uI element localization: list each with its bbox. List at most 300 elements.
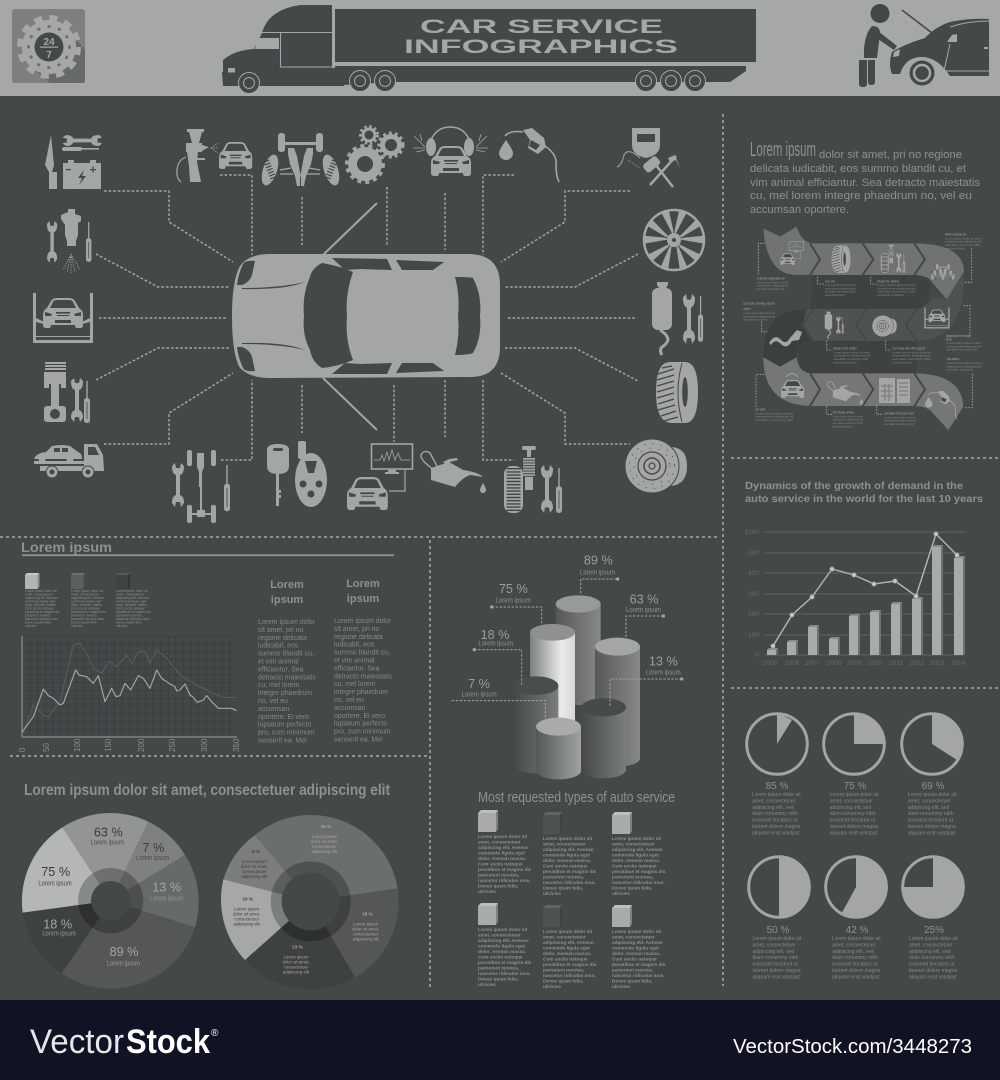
tiny captions: consectetuer adipiscing elit	[833, 418, 863, 422]
service item 6: ultricies	[612, 984, 630, 989]
text column 2: sit amet, pri no	[334, 626, 379, 633]
service item 1: dolor. Aenean massa.	[478, 856, 526, 861]
tiny labels: Car brake disk with support	[892, 347, 925, 351]
pie 69 percent: diam nonummy nibh	[908, 811, 954, 817]
pie 85 percent: diam nonummy nibh	[752, 811, 798, 817]
service item 1	[478, 810, 532, 894]
pie 75 percent: euismod tincidunt ut	[830, 818, 876, 824]
tiny captions: euismod tincidunt	[833, 360, 857, 364]
callout labels: 75 %	[499, 582, 528, 596]
pie 85 percent	[747, 712, 807, 836]
tiny captions: consectetuer adipiscing elit	[947, 344, 982, 348]
intro text: vim animal efficiantur. Sea detracto maiestatis	[750, 177, 981, 189]
icon: 24/7 gear badge: 7	[46, 50, 52, 61]
service item 2: commodo ligula eget	[543, 852, 590, 858]
service item 6: amet, consectetuer	[612, 934, 655, 940]
service item 2	[543, 812, 597, 896]
legend cube: mid: dolor. Aenean massa.	[71, 603, 103, 607]
text column 2: efficiantur. Sea	[334, 665, 380, 672]
pie 69 percent	[902, 712, 962, 836]
y axis labels	[745, 529, 759, 659]
cylinder 7 percent	[536, 718, 581, 779]
service item 3: adipiscing elit. Aenean	[612, 847, 663, 852]
service item 5: ultricies	[543, 984, 561, 989]
text column 1	[258, 579, 316, 744]
pie 25 percent: Lorem ipsum dolor sit	[909, 936, 958, 942]
legend cube: mid	[71, 573, 106, 628]
service item 6: Donec quam felis,	[612, 978, 652, 984]
icon: 24/7 gear badge	[12, 9, 85, 83]
donut chart 1: Lorem ipsum	[136, 855, 169, 862]
car top view	[232, 254, 500, 378]
callout labels: 89 %	[584, 553, 613, 567]
service item 6	[612, 905, 666, 989]
y axis labels: 500	[748, 550, 759, 557]
pie 42 percent: diam nonummy nibh	[832, 955, 878, 961]
service item 4: commodo ligula eget	[478, 944, 525, 948]
legend cube: light: Cum sociis natoque	[25, 606, 54, 610]
donut chart 2: Lorem ipsum	[353, 921, 379, 926]
pie 85 percent: euismod tincidunt ut	[752, 818, 798, 824]
pie 42 percent: euismod tincidunt ut	[832, 962, 878, 968]
tiny captions: consectetuer adipiscing elit	[877, 286, 916, 290]
tiny captions: euismod tincidunt	[945, 246, 965, 250]
tiny captions: Lorem ipsum dolor sit amet	[945, 236, 982, 240]
header band	[0, 0, 1000, 96]
icon: shock absorber, tire and tools	[504, 446, 562, 513]
x axis labels: 2006	[785, 660, 800, 667]
pie 75 percent	[824, 712, 886, 836]
x axis labels: 2012	[910, 660, 925, 667]
service item 4: Donec quam felis,	[478, 976, 518, 982]
donut chart 1: 7 %	[142, 841, 164, 855]
tiny captions: consectetuer adipiscing elit	[833, 354, 870, 358]
service item 2: Lorem ipsum dolor sit	[543, 836, 593, 841]
tiny labels: lift car	[946, 338, 953, 342]
tiny labels: Gas station	[947, 357, 959, 361]
service item 4: adipiscing elit. Aenean	[478, 938, 529, 943]
text column 1: regione delicata	[258, 635, 307, 642]
tiny captions: Lorem ipsum dolor sit amet	[884, 415, 916, 419]
title: CAR SERVICE	[420, 16, 663, 38]
line chart: 100	[73, 738, 82, 752]
tiny labels: Oil change service	[833, 410, 854, 414]
x axis labels: 2008	[827, 660, 842, 667]
icon: gears	[347, 126, 403, 182]
service item 5: commodo ligula eget	[543, 946, 590, 950]
tiny captions: consectetuer adipiscing elit	[743, 314, 775, 318]
footer logo	[30, 1023, 219, 1061]
donut chart 2: dolor sit amet,	[233, 911, 260, 916]
text column 1: accumsan	[258, 706, 290, 713]
text column 2: Lorem	[346, 578, 380, 590]
service item 6: Cum sociis natoque	[612, 956, 657, 962]
donut chart 1: 18 %	[43, 917, 72, 931]
icon: brake disc	[625, 439, 687, 493]
panel: 3D cylinder chart: Lorem ipsum	[496, 598, 531, 605]
service item 5: Lorem ipsum dolor sit	[543, 929, 593, 934]
legend cube: mid: nascetur ridiculus mus.	[71, 617, 105, 621]
legend cube: light: amet, consectetuer	[25, 592, 54, 596]
text column 1: oportere. Ei vero	[258, 714, 309, 721]
legend cube: mid: ultricies	[71, 624, 83, 628]
donut chart 2: Lorem ipsum	[283, 955, 309, 960]
tiny captions: sed diam nonummy nibh	[833, 421, 863, 425]
line chart: 350	[232, 738, 241, 752]
service item 5: Cum sociis natoque	[543, 956, 588, 962]
icon: welding mask and hammers	[617, 128, 680, 187]
icon: clamp, wrench and battery	[45, 135, 102, 189]
intro text	[750, 139, 981, 216]
diagram: car with service connectors	[33, 126, 706, 523]
panel: 3D cylinder chart: Lorem ipsum	[626, 607, 661, 614]
line chart: 150	[104, 738, 113, 752]
service item 4: penatibus et magnis dis	[478, 960, 532, 965]
cylinder 13 percent	[581, 698, 626, 778]
donut chart 2: 8 %	[252, 849, 261, 854]
service item 5: amet, consectetuer	[543, 934, 586, 940]
donut chart 1: 89 %	[110, 945, 138, 959]
line chart: 300	[200, 738, 209, 752]
pie 42 percent: laoreet dolore magna	[832, 968, 880, 974]
icon: car lift	[33, 293, 93, 343]
service item 6: dolor. Aenean massa.	[612, 951, 660, 956]
donut chart 2: dolor sit amet,	[241, 864, 268, 869]
pie 25 percent: amet, consectetuer	[909, 942, 953, 948]
text column 1: Lorem ipsum dolor	[258, 619, 316, 626]
legend cube: mid: Cum sociis natoque	[71, 606, 100, 610]
legend cube: dark: nascetur ridiculus mus.	[116, 617, 150, 621]
pie 85 percent: adipiscing elit, sed	[752, 805, 794, 811]
title: INFOGRAPHICS	[404, 36, 678, 58]
pie 25 percent: diam nonummy nibh	[909, 955, 955, 961]
text column 2: regione delicata	[334, 634, 383, 641]
intro text: dolor sit amet, pri no regione	[819, 149, 962, 161]
tiny captions: Lorem ipsum dolor sit amet	[947, 361, 982, 365]
line chart: 250	[168, 738, 177, 752]
donut chart 1: 13 %	[152, 880, 181, 894]
donut chart 2: adipiscing elit	[353, 936, 379, 941]
service item 2: amet, consectetuer	[543, 842, 586, 846]
text column 2: no, vel eu	[334, 697, 364, 704]
donut chart 1: 63 %	[94, 825, 123, 839]
service item 3	[612, 812, 666, 896]
donut chart 2: Lorem ipsum	[312, 834, 337, 839]
tiny captions: Lorem ipsum dolor sit amet	[757, 280, 789, 284]
y axis labels: 1000	[745, 529, 759, 536]
line chart: 0	[18, 747, 27, 752]
legend cube: light: Lorem ipsum dolor sit	[25, 589, 57, 593]
pie 75 percent: 75 %	[844, 781, 867, 792]
service item 1: ultricies	[478, 889, 496, 894]
text column 1: no, vel eu	[258, 698, 288, 705]
tiny captions: consectetuer adipiscing elit	[755, 415, 794, 419]
pie 50 percent: adipiscing elit, sed	[752, 949, 794, 955]
text column 2: cu, mel lorem	[334, 681, 376, 688]
service item 1: amet, consectetuer	[478, 840, 521, 844]
icon: alloy wheel	[642, 210, 706, 271]
tiny captions: sed diam nonummy nibh	[757, 287, 785, 291]
tiny labels: Wheel camber toe	[945, 232, 967, 236]
y axis labels: 400	[748, 570, 759, 577]
tiny labels: Diagnostics the vehicle	[946, 334, 970, 338]
tiny captions: sed diam nonummy nibh	[833, 357, 869, 361]
service item 3: Donec quam felis,	[612, 886, 652, 890]
pie 25 percent	[902, 856, 965, 980]
service item 3: ultricies	[612, 891, 630, 896]
service item 4: dolor. Aenean massa.	[478, 949, 526, 954]
pie 42 percent: 42 %	[846, 925, 869, 936]
cylinder 18 percent	[513, 676, 558, 773]
service item 5: parturient montes,	[543, 968, 584, 972]
pie 69 percent: adipiscing elit, sed	[908, 805, 949, 811]
text column 1: Lorem	[270, 579, 304, 591]
legend cube: mid: adipiscing elit. Aenean	[71, 596, 104, 600]
pie 85 percent: laoreet dolore magna	[752, 824, 800, 830]
donut chart 1	[22, 813, 199, 989]
text column 1: summo blandit cu,	[258, 651, 314, 658]
x axis labels: 2009	[847, 660, 862, 667]
legend cube: light: adipiscing elit. Aenean	[25, 596, 58, 600]
tiny labels: Repair the vehicle	[877, 280, 899, 284]
x axis labels: 2011	[889, 660, 903, 667]
pie 42 percent	[826, 855, 888, 980]
donut chart 2: consectetuer	[312, 844, 337, 849]
donut chart 2: consectetuer	[242, 869, 267, 874]
service item 6: penatibus et magnis dis	[612, 962, 666, 967]
text column 2: summo blandit cu,	[334, 650, 390, 657]
panel: 3D cylinder chart: Lorem ipsum	[580, 569, 615, 576]
legend cube: light: ultricies	[25, 624, 37, 628]
tiny captions: consectetuer adipiscing elit	[892, 354, 931, 358]
donut chart 1: Lorem ipsum	[150, 896, 183, 903]
tiny captions: euismod tincidunt	[833, 424, 853, 428]
pie 85 percent: 85 %	[766, 781, 789, 792]
pie 69 percent: amet, consectetuer	[908, 798, 951, 804]
panel: 3D cylinder chart: Lorem ipsum	[462, 692, 497, 699]
text column 2: accumsan	[334, 705, 366, 712]
tiny captions: euismod tincidunt	[892, 360, 913, 364]
donut chart 2: consectetuer	[353, 931, 379, 936]
panel: 3D cylinder chart: Lorem ipsum	[478, 641, 513, 648]
donut chart 1: 75 %	[41, 865, 70, 879]
tiny captions: sed diam nonummy nibh	[877, 290, 916, 294]
legend cube: light: commodo ligula eget	[25, 600, 56, 604]
footer logo: Vector	[30, 1023, 124, 1061]
tiny captions: euismod tincidunt	[825, 293, 845, 297]
callout labels: 13 %	[649, 654, 678, 668]
service item 5: nascetur ridiculus mus.	[543, 973, 596, 978]
icon: 24/7 gear badge: 24	[43, 37, 55, 48]
tiny captions: Lorem ipsum dolor sit amet	[755, 411, 794, 415]
tiny labels: Repair of car muffler	[833, 347, 857, 351]
service item 4: ultricies	[478, 982, 496, 987]
legend cube: light: Donec quam felis,	[25, 620, 51, 624]
pie 75 percent: adipiscing elit, sed	[830, 805, 871, 811]
tiny labels: Car wash	[755, 407, 766, 411]
service item 2: adipiscing elit. Aenean	[543, 847, 594, 852]
service item 2: Cum sociis natoque	[543, 864, 588, 868]
tiny captions: sed diam nonummy	[743, 318, 767, 322]
text column 2: luptatum perfecto	[334, 721, 387, 728]
footer logo: Stock	[126, 1023, 210, 1061]
text column 1: et vim animal	[258, 658, 299, 666]
service item 3: dolor. Aenean massa.	[612, 858, 660, 863]
pie 85 percent: amet, consectetuer	[752, 798, 796, 804]
tiny captions: euismod tincidunt	[877, 293, 904, 297]
tiny captions: consectetuer adipiscing elit	[884, 419, 916, 423]
pie 75 percent: aliquam erat volutpat	[830, 830, 878, 836]
callout labels: 63 %	[630, 593, 658, 607]
legend cube: mid: Donec quam felis,	[71, 620, 97, 624]
pie 50 percent: amet, consectetuer	[752, 942, 796, 948]
service item 3: commodo ligula eget	[612, 852, 659, 858]
legend cube: dark: amet, consectetuer	[116, 592, 145, 596]
text column 2: senserit ea. Mei	[334, 736, 383, 744]
callout labels: 18 %	[481, 628, 509, 642]
legend cube: light: dolor. Aenean massa.	[25, 603, 57, 607]
service item 1: Lorem ipsum dolor sit	[478, 834, 528, 839]
tiny labels: Car interior cleaning, vacuum	[743, 301, 775, 305]
service item 6: Lorem ipsum dolor sit	[612, 929, 662, 934]
tiny captions: Lorem ipsum dolor sit amet	[947, 341, 982, 345]
pie 69 percent: laoreet dolore magna	[908, 824, 956, 830]
icon: injector, wrench, screwdriver	[47, 209, 91, 273]
text column 2: detracto maiestatis	[334, 673, 392, 680]
bars	[767, 545, 965, 655]
icon: tow truck	[34, 444, 104, 478]
pie 75 percent: amet, consectetuer	[830, 798, 873, 804]
intro text: Lorem ipsum	[750, 139, 816, 161]
text column 1: integre phaedrum	[258, 690, 312, 697]
tiny captions: consectetuer adipiscing elit	[757, 284, 789, 288]
legend cube: mid: parturient montes,	[71, 614, 98, 618]
text column 1: sit amet, pri no	[258, 627, 303, 634]
service item 2: parturient montes,	[543, 874, 584, 880]
text column 2: et vim animal	[334, 658, 375, 664]
service item 2: ultricies	[543, 891, 561, 896]
service item 4: Cum sociis natoque	[478, 954, 523, 960]
donut chart 2: 28 %	[362, 911, 373, 916]
donut chart 2: 19 %	[242, 896, 254, 901]
service item 3: Lorem ipsum dolor sit	[612, 836, 662, 841]
icon: axle and tools	[172, 450, 230, 523]
panel: percentage pies	[747, 712, 965, 980]
pie 25 percent: adipiscing elit, sed	[909, 949, 951, 955]
icon: muffler and tools	[652, 282, 703, 355]
pie 42 percent: amet, consectetuer	[832, 942, 876, 948]
intro text: cu, mel lorem integre phaedrum no, vel eu	[750, 190, 972, 202]
tiny captions: consectetuer adipiscing elit	[825, 286, 856, 290]
cylinder 89 percent	[556, 595, 601, 705]
service item 5	[543, 905, 597, 989]
cylinder 75 percent	[530, 624, 575, 725]
tiny captions: Lorem ipsum dolor sit amet	[743, 311, 775, 315]
service item 6: nascetur ridiculus mus.	[612, 973, 665, 978]
pie 85 percent: aliquam erat volutpat	[752, 830, 800, 836]
panel: 3D cylinder chart: Lorem ipsum	[646, 670, 681, 677]
icon: oil can	[421, 451, 486, 493]
legend cube: dark: Cum sociis natoque	[116, 606, 145, 610]
text column 1: ipsum	[271, 594, 303, 606]
chart title	[745, 481, 983, 505]
legend cube: light: penatibus et magnis dis	[25, 610, 60, 614]
tiny captions: sed diam nonummy nibh	[892, 357, 931, 361]
icon: suspension	[258, 133, 343, 187]
text column 2: iudicabit, eos	[334, 642, 375, 649]
panel heading: Lorem ipsum	[21, 539, 112, 555]
x axis labels: 2010	[868, 660, 883, 667]
text column 1: luptatum perfecto	[258, 722, 311, 729]
y axis labels: 100	[748, 632, 759, 639]
tiny labels: Calculation of the cost of work	[884, 411, 914, 415]
panel: donut charts	[22, 782, 399, 989]
panel: demand growth chart	[745, 481, 983, 667]
callout labels	[468, 553, 678, 691]
service item 1: adipiscing elit. Aenean	[478, 845, 529, 850]
service item 2: penatibus et magnis dis	[543, 869, 597, 874]
pie 25 percent: 25%	[924, 925, 944, 936]
text column 2: pro, cum minimum	[334, 729, 391, 736]
service item 3: amet, consectetuer	[612, 842, 655, 846]
text column 1: cu, mel lorem	[258, 682, 300, 689]
service item 5: dolor. Aenean massa.	[543, 951, 591, 956]
legend cube: light: nascetur ridiculus mus.	[25, 617, 59, 621]
heading: Most requested types of auto service	[478, 789, 675, 806]
legend cube: dark: parturient montes,	[116, 614, 143, 618]
icon: car key and alarm remote	[267, 441, 327, 507]
title	[404, 16, 678, 58]
tiny captions: sed diam nonummy nibh	[825, 290, 856, 294]
tiny labels: Tyre, tire	[825, 280, 835, 284]
donut chart 2: dolor sit amet,	[311, 839, 338, 844]
chart title: Dynamics of the growth of demand in the	[745, 481, 963, 492]
donut chart 2: consectetuer	[284, 965, 309, 970]
callout labels: 7 %	[468, 677, 490, 691]
heading: Lorem ipsum dolor sit amet, consectetuer adipiscing elit	[24, 782, 390, 799]
pie 50 percent: laoreet dolore magna	[752, 968, 801, 974]
panel: most requested services	[478, 789, 675, 989]
service item 3: penatibus et magnis dis	[612, 869, 666, 874]
footer bar	[0, 1000, 1000, 1080]
legend cube: mid: Lorem ipsum dolor sit	[71, 589, 103, 593]
tiny labels: Computer diagnostics car	[757, 276, 786, 280]
donut chart 2: dolor sit amet,	[352, 926, 379, 931]
text column 1: senserit ea. Mei	[258, 738, 307, 744]
pie 75 percent: diam nonummy nibh	[830, 811, 876, 817]
open door lines	[323, 203, 377, 430]
intro text: delicata iudicabit, eos summo blandit cu, et	[750, 163, 966, 175]
gridlines	[765, 532, 965, 655]
chart title: auto service in the world for the last 10 years	[745, 494, 983, 505]
pie 50 percent: Lorem ipsum dolor sit	[752, 936, 802, 942]
service item 4: parturient montes,	[478, 966, 519, 970]
service item 4: amet, consectetuer	[478, 932, 521, 938]
donut chart 2: consectetuer	[234, 916, 260, 921]
pie 42 percent: Lorem ipsum dolor sit	[832, 936, 881, 942]
legend cube: dark: Donec quam felis,	[116, 620, 142, 624]
x axis labels: 2013	[930, 660, 945, 667]
x axis labels	[763, 660, 966, 667]
donut chart 2: dolor sit amet,	[282, 960, 310, 965]
pie 50 percent	[749, 856, 811, 980]
service item 4	[478, 903, 532, 987]
icon: fuel nozzle and drop	[499, 128, 559, 182]
donut chart 2: adipiscing elit	[283, 970, 310, 975]
y axis labels: 0	[755, 652, 759, 659]
legend cube: light	[25, 573, 60, 628]
x axis labels: 2005	[763, 660, 778, 667]
